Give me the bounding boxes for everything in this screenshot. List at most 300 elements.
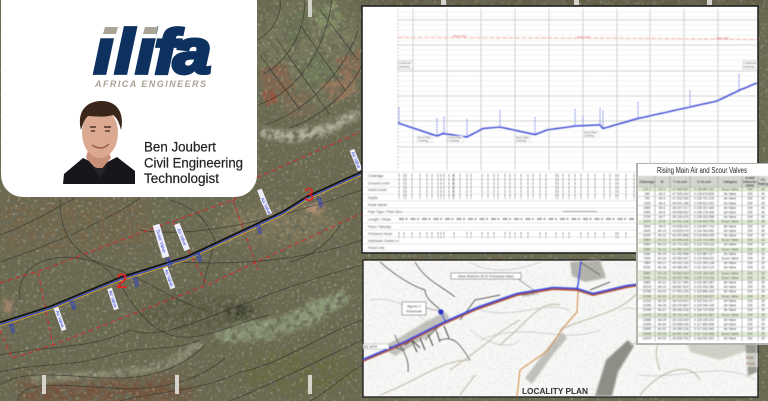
- table body: 3 135 020.558: [694, 215, 714, 219]
- profile data table: Pipe Type / Pipe Size: [368, 210, 402, 214]
- table body: 200: [747, 313, 753, 317]
- profile chart: Static HGL: [716, 36, 730, 40]
- table body: SV-16: [658, 256, 667, 260]
- table body: 7880: [643, 261, 651, 265]
- table body: 3 118 150.230: [694, 318, 714, 322]
- table body: 40: [761, 234, 765, 238]
- table body: AV-33: [658, 337, 666, 341]
- profile chart: Crossing: [584, 134, 595, 138]
- table body: Air Valve: [724, 234, 736, 238]
- table body: 6380: [643, 247, 651, 251]
- profile data table: Pressure Head: [368, 232, 392, 236]
- table body: 200: [747, 290, 753, 294]
- profile chart: Crossing: [449, 138, 460, 142]
- pressure main callout: [451, 273, 535, 291]
- table body: 1240: [643, 201, 651, 205]
- locality plan heading: LOCALITY PLAN: [522, 387, 588, 396]
- table body: 10210: [643, 285, 652, 289]
- table body: 3 120 387.567: [694, 280, 714, 284]
- table body: 3 123 700.118: [694, 243, 714, 247]
- table body: 3 117 652.844: [694, 327, 714, 331]
- table body: Air Valve: [724, 327, 736, 331]
- table body: -36 919.510: [671, 299, 689, 303]
- table body: 25: [761, 308, 765, 312]
- table body: -47 002.060: [671, 197, 689, 201]
- table body: -35 216.009: [671, 318, 689, 322]
- table body: AV-13: [658, 243, 666, 247]
- table body: 3 119 880.316: [694, 290, 714, 294]
- table body: 200: [747, 192, 753, 196]
- reservoir callout: Ngubu 2: [407, 304, 421, 308]
- table body: 32: [761, 247, 765, 251]
- table body: Air Valve: [724, 215, 736, 219]
- table body: 3 121 180.440: [694, 271, 714, 275]
- table body: 3 134 807.704: [694, 224, 714, 228]
- table body: -43 401.868: [671, 234, 689, 238]
- table body: 200: [747, 206, 753, 210]
- table body: AV-4: [659, 201, 666, 205]
- section marker 2: 2: [116, 270, 128, 293]
- table body: 25: [761, 299, 765, 303]
- table body: 4400: [643, 229, 651, 233]
- table body: 3 117 880.508: [694, 322, 714, 326]
- table body: Air Valve: [724, 252, 736, 256]
- table body: Air Valve: [724, 224, 736, 228]
- route labels: P291: [746, 361, 756, 366]
- table body: -46 007.317: [671, 206, 689, 210]
- table body: 3 122 887.117: [694, 252, 714, 256]
- table body: 5240: [643, 234, 651, 238]
- table body: 32: [761, 238, 765, 242]
- table body: Scour Valve: [722, 238, 739, 242]
- table: rising main air and scour valves: [636, 163, 768, 345]
- table body: 25: [761, 318, 765, 322]
- table body: 25: [761, 313, 765, 317]
- table body: -41 991.224: [671, 247, 689, 251]
- table body: 40: [761, 215, 765, 219]
- profile data table: Invert Level: [368, 188, 387, 192]
- table body: SV-1: [659, 188, 666, 192]
- table body: 40: [761, 220, 765, 224]
- table body: AV-2: [659, 192, 666, 196]
- table body: AV-29: [658, 318, 666, 322]
- table body: 200: [747, 266, 753, 270]
- table body: 3 119 341.417: [694, 299, 714, 303]
- profile chart: Scour Pipe: [449, 136, 462, 140]
- reservoir marker: [438, 309, 444, 315]
- table body: 6180: [643, 252, 651, 256]
- table body: SV-19: [658, 271, 667, 275]
- table body: 3 134 304.062: [694, 229, 714, 233]
- profile chart: [398, 9, 757, 170]
- table body: 11690: [643, 304, 652, 308]
- table body: -38 687.902: [671, 285, 689, 289]
- table body: ID: [660, 180, 664, 184]
- table body: AV-10: [658, 229, 666, 233]
- panel: company and person card: [1, 0, 257, 197]
- valve labels along pipeline: Air Valve: [176, 228, 188, 247]
- table body: 200: [747, 243, 753, 247]
- table body: 3 135 701.120: [694, 197, 714, 201]
- table body: Scour Valve: [722, 332, 739, 336]
- reservoir callout: [402, 302, 439, 315]
- table body: 25: [761, 322, 765, 326]
- table body: AV-9: [659, 224, 666, 228]
- table body: 7290: [643, 256, 651, 260]
- table body: -35 701.442: [671, 313, 689, 317]
- table body: -40 412.118: [672, 261, 689, 265]
- table body: AV-3: [659, 197, 666, 201]
- table body: 200: [747, 256, 753, 260]
- table body: 12090: [643, 308, 652, 312]
- table body: 200: [747, 280, 753, 284]
- table body: 32: [761, 261, 765, 265]
- table body: AV-25: [658, 299, 666, 303]
- name and job title: Civil Engineering: [144, 156, 243, 170]
- table body: 200: [747, 247, 753, 251]
- table body: 40: [761, 229, 765, 233]
- valve labels along pipeline: Air Valve: [260, 197, 272, 216]
- table body: AV-21: [658, 280, 666, 284]
- table body: AV-6: [659, 210, 666, 214]
- table body: 3 135 327.440: [694, 206, 714, 210]
- route labels: KE WTP: [364, 345, 378, 349]
- table body: -40 080.652: [671, 266, 689, 270]
- table body: 1890: [643, 206, 651, 210]
- profile chart: Scour Pipe: [516, 136, 529, 140]
- table body: -42 994.026: [671, 238, 689, 242]
- table body: 3 135 176.406: [694, 210, 714, 214]
- table body: -42 701.330: [671, 243, 689, 247]
- valve labels along pipeline: 200: [254, 224, 263, 236]
- table body: 3 123 275.316: [694, 247, 714, 251]
- table body: 25: [761, 337, 765, 341]
- table body: 3 122 546.022: [694, 256, 714, 260]
- table body: 10780: [643, 290, 652, 294]
- profile chart: Drawings: [744, 64, 756, 68]
- name and job title: Technologist: [144, 171, 219, 186]
- table body: Air Valve: [724, 337, 736, 341]
- valve labels along pipeline: Air Valve: [350, 151, 362, 170]
- table body: Air Valve: [724, 206, 736, 210]
- valve labels along pipeline: 200: [131, 277, 140, 289]
- profile data table: Depth: [368, 196, 378, 200]
- table body: 200: [747, 234, 753, 238]
- table body: Scour Valve: [722, 188, 739, 192]
- table body: Air Valve: [724, 290, 736, 294]
- table body: 200: [747, 271, 753, 275]
- table body: 40: [761, 197, 765, 201]
- table body: Air Valve: [724, 261, 736, 265]
- table body: 40: [761, 201, 765, 205]
- profile chart: Scour Pipe: [584, 130, 597, 134]
- table body: AV-7: [659, 215, 666, 219]
- table body: Category: [723, 180, 737, 184]
- table body: Air Valve: [724, 210, 736, 214]
- table body: Air Valve: [724, 304, 736, 308]
- table body: -47 505.304: [671, 192, 689, 196]
- table body: 3 121 900.136: [694, 261, 714, 265]
- table body: 8150: [643, 266, 651, 270]
- table body: -44 911.218: [672, 220, 689, 224]
- ilifa logo: ilifa: [94, 17, 211, 86]
- table body: 3 119 064.145: [694, 304, 714, 308]
- table body: 200: [747, 327, 753, 331]
- valve labels along pipeline: Air Valve: [55, 310, 66, 329]
- profile chart: Crossing: [516, 138, 527, 142]
- table body: SV-14: [658, 247, 667, 251]
- table body: 14370: [643, 337, 652, 341]
- table body: 40: [761, 188, 765, 192]
- table body: 12470: [643, 313, 652, 317]
- table body: Diameter: [743, 180, 758, 184]
- table body: -34 390.118: [672, 327, 689, 331]
- table body: 3 119 548.037: [694, 294, 714, 298]
- table body: 200: [747, 261, 753, 265]
- table body: Scour Valve: [722, 271, 739, 275]
- valve labels along pipeline: Scour Valve: [155, 229, 167, 254]
- route labels: R56: [746, 355, 754, 360]
- table body: 25: [761, 332, 765, 336]
- name and job title: Ben Joubert: [144, 140, 216, 154]
- table body: 180: [644, 192, 650, 196]
- table body: AV-23: [658, 290, 666, 294]
- water pipeline route: [363, 261, 640, 397]
- table body: 25: [761, 285, 765, 289]
- table body: 3 118 720.908: [694, 308, 714, 312]
- rising main pipeline corridor: [0, 132, 362, 358]
- valve labels along pipeline: 200: [315, 197, 324, 209]
- table body: 2790: [643, 215, 651, 219]
- table body: 3 120 714.018: [694, 276, 714, 280]
- table body: 40: [761, 224, 765, 228]
- table body: Air Valve: [724, 192, 736, 196]
- table body: -39 117.065: [672, 280, 689, 284]
- table body: 200: [747, 197, 753, 201]
- table body: Air Valve: [724, 197, 736, 201]
- table body: Air Valve: [724, 318, 736, 322]
- table body: -37 214.176: [671, 294, 689, 298]
- valve labels along pipeline: 200: [7, 323, 16, 335]
- table body: 3 121 520.210: [694, 266, 714, 270]
- table body: Air Valve: [724, 308, 736, 312]
- table body: -36 050.218: [671, 308, 689, 312]
- table body: 200: [747, 294, 753, 298]
- table body: AV-5: [659, 206, 666, 210]
- table body: 25: [761, 290, 765, 294]
- pressure main callout: New 500mm Ø DI Pressure Main: [458, 274, 514, 278]
- table body: 200: [747, 238, 753, 242]
- table body: SV-32: [658, 332, 667, 336]
- table body: 200: [747, 337, 753, 341]
- table body: (mm): [746, 184, 754, 188]
- table body: 200: [747, 229, 753, 233]
- table body: AV-27: [658, 308, 666, 312]
- valve labels along pipeline: 200: [194, 252, 203, 264]
- field patches: [258, 62, 296, 100]
- table body: -45 190.415: [671, 215, 689, 219]
- profile data table: Flood Line: [368, 246, 385, 250]
- table body: 32: [761, 271, 765, 275]
- profile chart: Drawings: [399, 64, 411, 68]
- valve labels along pipeline: 200: [164, 257, 173, 269]
- table body: SV-20: [658, 276, 667, 280]
- table body: Chainage: [640, 180, 655, 184]
- table body: AV-30: [658, 322, 666, 326]
- table body: SV-12: [658, 238, 667, 242]
- table body: -40 964.347: [671, 256, 689, 260]
- table body: 3 118 401.667: [694, 313, 714, 317]
- table body: 200: [747, 322, 753, 326]
- profile chart: Continued: [744, 61, 756, 65]
- table body: SV-28: [658, 313, 667, 317]
- table body: Scour Valve: [722, 247, 739, 251]
- table body: 200: [747, 276, 753, 280]
- valve labels along pipeline: [7, 149, 362, 335]
- route labels: R56/56-1: [522, 291, 539, 298]
- profile data table: Ground Level: [368, 182, 390, 186]
- table body: X Co-ord: [697, 180, 711, 184]
- profile chart: Static HGL: [577, 35, 591, 39]
- profile data table: Length / Slope: [368, 218, 391, 222]
- africa engineers wordmark: AFRICA ENGINEERS: [94, 79, 206, 89]
- table body: 3 120 005.782: [694, 285, 714, 289]
- table body: 200: [747, 318, 753, 322]
- table body: 32: [761, 243, 765, 247]
- profile data table: [363, 172, 757, 251]
- table body: Scour Valve: [722, 276, 739, 280]
- table body: 200: [747, 215, 753, 219]
- table body: Air Valve: [724, 229, 736, 233]
- table body: -33 505.752: [671, 337, 689, 341]
- table body: 25: [761, 327, 765, 331]
- table body: 13340: [643, 322, 652, 326]
- table body: 32: [761, 256, 765, 260]
- table body: 40: [761, 210, 765, 214]
- valve labels along pipeline: Air Valve: [164, 269, 175, 288]
- table body: Scour Valve: [722, 313, 739, 317]
- table body: -37 991.234: [671, 290, 689, 294]
- table body: 13650: [643, 327, 652, 331]
- table body: -39 802.310: [671, 271, 689, 275]
- table body: SV-8: [659, 220, 666, 224]
- table body: AV-18: [658, 266, 666, 270]
- table body: -43 823.074: [671, 229, 689, 233]
- table body: 200: [747, 224, 753, 228]
- table body: Pn: [761, 178, 765, 182]
- table body: AV-17: [658, 261, 666, 265]
- table body: Scour Valve: [722, 220, 739, 224]
- route labels: [363, 291, 758, 367]
- table body: 200: [747, 210, 753, 214]
- table body: 25: [761, 294, 765, 298]
- table body: 200: [747, 252, 753, 256]
- panel: longitudinal profile: [362, 6, 758, 253]
- table body: 3 135 879.606: [694, 192, 714, 196]
- table body: -46 522.188: [671, 201, 689, 205]
- profile data table: Chainage: [368, 174, 383, 178]
- table body: Air Valve: [724, 280, 736, 284]
- table body: 5650: [643, 238, 651, 242]
- valve labels along pipeline: 200: [68, 300, 77, 312]
- table body: AV-22: [658, 285, 666, 289]
- table body: SV-24: [658, 294, 667, 298]
- table body: Air Valve: [724, 266, 736, 270]
- table body: -45 508.562: [671, 210, 689, 214]
- table body: Scour Valve: [722, 256, 739, 260]
- profile data table: Hydraulic Grade Ln: [368, 239, 399, 243]
- table body: 3 134 940.756: [694, 220, 714, 224]
- table body: 3540: [643, 224, 651, 228]
- table body: 121.2: [643, 188, 651, 192]
- table body: Air Valve: [724, 322, 736, 326]
- table body: 200: [747, 308, 753, 312]
- table body: 3 117 230.466: [694, 332, 714, 336]
- table body: 5990: [643, 243, 651, 247]
- table body: 200: [747, 188, 753, 192]
- table body: Y Co-ord: [673, 180, 687, 184]
- profile data table: Node Name: [368, 203, 387, 207]
- table body: 3 116 901.320: [694, 337, 714, 341]
- table body: Rating: [758, 182, 768, 186]
- profile data table: Flow / Velocity: [368, 225, 391, 229]
- table body: -39 522.786: [671, 276, 689, 280]
- table body: -36 470.887: [671, 304, 689, 308]
- table body: 3 135 511.022: [694, 201, 714, 205]
- table body: 8560: [643, 271, 651, 275]
- table body: 11310: [643, 299, 652, 303]
- table body: Air Valve: [724, 243, 736, 247]
- table body: 32: [761, 266, 765, 270]
- table body: 11060: [643, 294, 652, 298]
- table body: 14000: [643, 332, 652, 336]
- table body: -47 569.557: [671, 188, 689, 192]
- table body: -33 947.436: [671, 332, 689, 336]
- table body: Air Valve: [724, 299, 736, 303]
- table body: [638, 176, 768, 341]
- profile chart: Scour Pipe: [418, 136, 431, 140]
- table body: AV-15: [658, 252, 666, 256]
- portrait photo: [63, 101, 135, 184]
- profile chart: Static HGL: [453, 34, 467, 38]
- table body: 3070: [643, 220, 651, 224]
- table body: 32: [761, 252, 765, 256]
- table body: 40: [761, 206, 765, 210]
- table body: 200: [747, 304, 753, 308]
- table body: 200: [747, 201, 753, 205]
- table body: 9040: [643, 276, 651, 280]
- table body: 200: [747, 299, 753, 303]
- valve labels along pipeline: Air Valve: [108, 290, 118, 309]
- table body: -34 855.026: [671, 322, 689, 326]
- table body: Air Valve: [724, 285, 736, 289]
- table body: 200: [747, 220, 753, 224]
- table body: 3 123 899.045: [694, 234, 714, 238]
- table body: 25: [761, 304, 765, 308]
- table body: Install: [745, 176, 755, 180]
- name and job title: [144, 140, 243, 186]
- panel: locality plan map: [363, 260, 758, 397]
- table body: Air Valve: [724, 201, 736, 205]
- table body: 9380: [643, 280, 651, 284]
- table body: 3 123 742.408: [694, 238, 714, 242]
- table body: -44 508.442: [671, 224, 689, 228]
- table body: AV-26: [658, 304, 666, 308]
- table body: 25: [761, 276, 765, 280]
- table body: 200: [747, 332, 753, 336]
- table body: 3 135 887.021: [694, 188, 714, 192]
- table body: AV-31: [658, 327, 666, 331]
